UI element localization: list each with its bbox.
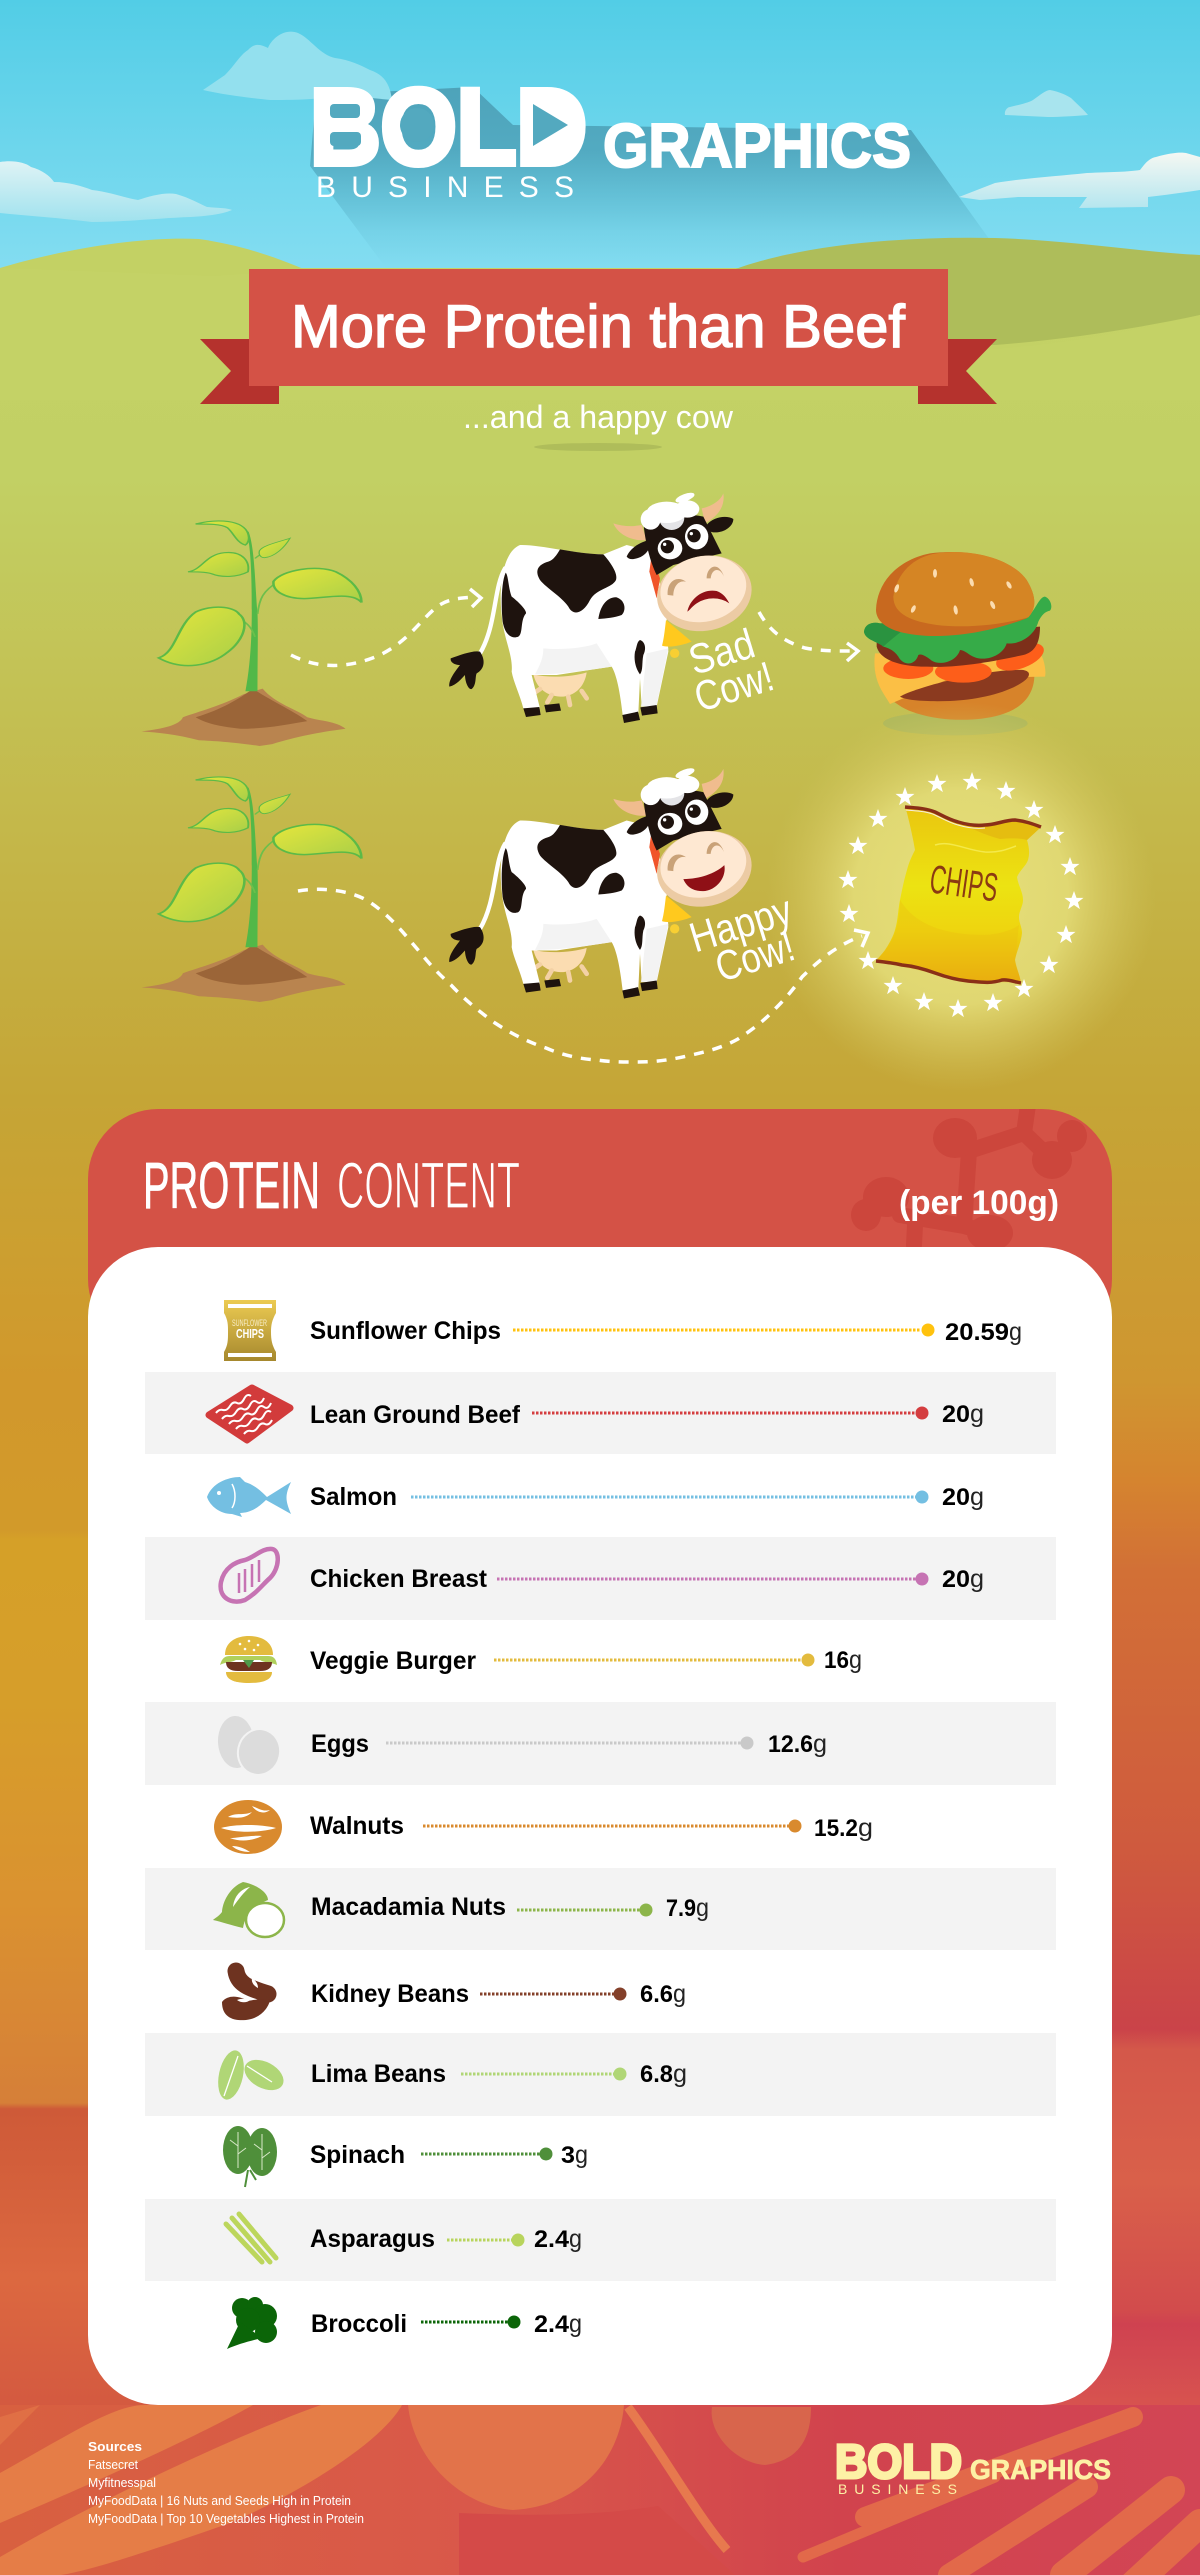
row: Eggs — [217, 1715, 827, 1779]
heading: CONTENT — [337, 1148, 520, 1222]
row: Salmon: Salmon — [310, 1483, 397, 1511]
row: Walnuts — [214, 1800, 873, 1854]
footer logo: BUSINESS — [838, 2481, 957, 2497]
row: Chicken Breast: g — [970, 1565, 984, 1593]
row: Asparagus: Asparagus — [310, 2225, 435, 2253]
row: Lean Ground Beef: 20 — [942, 1401, 970, 1428]
icon: sunflower chips bag: CHIPS — [236, 1326, 264, 1341]
row: Asparagus — [226, 2214, 582, 2262]
row: Sunflower Chips — [224, 1300, 1022, 1361]
row: Veggie Burger: 16 — [824, 1647, 849, 1674]
row: Salmon — [207, 1477, 984, 1517]
title: More Protein than Beef — [291, 293, 905, 360]
panel: protein content — [88, 1105, 1112, 2405]
row: Macadamia Nuts: Macadamia Nuts — [311, 1893, 506, 1921]
row: Veggie Burger — [220, 1636, 862, 1683]
row: Broccoli: g — [569, 2310, 582, 2338]
row: Walnuts: 15.2 — [814, 1815, 858, 1842]
sources: Fatsecret — [88, 2457, 138, 2472]
icon: eggs — [217, 1715, 284, 1779]
icon: walnut — [214, 1800, 282, 1854]
row: Kidney Beans: Kidney Beans — [311, 1980, 469, 2008]
row: Broccoli: Broccoli — [311, 2310, 407, 2338]
row: Lima Beans: Lima Beans — [311, 2060, 446, 2088]
row: Lean Ground Beef — [209, 1388, 984, 1440]
icon: kidney beans — [222, 1971, 270, 2020]
icon: veggie burger — [220, 1636, 277, 1683]
row: Sunflower Chips: Sunflower Chips — [310, 1317, 501, 1345]
chips bag — [876, 807, 1041, 983]
footer logo — [835, 2436, 1111, 2497]
sources: Sources — [88, 2439, 142, 2454]
row: Spinach: 3 — [561, 2142, 575, 2169]
label: happy cow: Cow! — [710, 922, 800, 991]
icon: asparagus — [226, 2214, 276, 2262]
label: sad cow: Sad — [683, 619, 760, 684]
star ring — [838, 772, 1084, 1017]
label: sad cow — [683, 619, 779, 721]
subtitle shadow — [534, 443, 662, 451]
arrow: sad cow to burger — [759, 612, 858, 661]
icon: spinach — [223, 2126, 277, 2187]
icon: sunflower chips bag: SUNFLOWER — [232, 1318, 267, 1328]
glow behind chips — [766, 702, 1156, 1092]
background: food photo right margin — [1000, 1100, 1200, 2575]
plant: bottom row — [141, 777, 361, 1002]
subtitle: ...and a happy cow — [463, 399, 734, 435]
row: Macadamia Nuts: g — [696, 1894, 709, 1922]
row: Salmon: 20 — [942, 1484, 970, 1511]
row: Salmon: g — [970, 1483, 984, 1511]
molecule watermark — [851, 1105, 1087, 1251]
row: Kidney Beans: g — [673, 1980, 686, 2008]
icon: lima beans — [214, 2048, 289, 2102]
row: Lean Ground Beef: g — [970, 1400, 984, 1428]
row: Asparagus: g — [569, 2225, 582, 2253]
row: Sunflower Chips: g — [1009, 1318, 1022, 1346]
burger — [864, 552, 1051, 735]
arrow: plant to chips — [298, 889, 868, 1062]
sources: MyFoodData | 16 Nuts and Seeds High in Protein — [88, 2493, 351, 2508]
row: Kidney Beans — [222, 1971, 686, 2020]
hills — [0, 238, 1200, 400]
row: Lima Beans: 6.8 — [640, 2061, 673, 2088]
icon: ground beef — [209, 1388, 290, 1440]
icon: macadamia — [213, 1882, 284, 1937]
background: food photo bottom — [0, 2405, 1200, 2575]
row: Veggie Burger: g — [849, 1646, 862, 1674]
row: Lean Ground Beef: Lean Ground Beef — [310, 1401, 521, 1429]
footer logo: GRAPHICS — [970, 2454, 1111, 2485]
cow: happy — [449, 766, 759, 998]
chips label: CHIPS — [927, 857, 1001, 911]
row: Walnuts: Walnuts — [310, 1812, 404, 1840]
row: Spinach — [223, 2126, 588, 2187]
row: Eggs: g — [813, 1730, 827, 1758]
row: Spinach: g — [575, 2141, 588, 2169]
icon: broccoli — [227, 2297, 277, 2349]
row: Chicken Breast: 20 — [942, 1566, 970, 1593]
icon: fish — [207, 1477, 291, 1517]
row: Veggie Burger: Veggie Burger — [310, 1647, 476, 1675]
row: Eggs: 12.6 — [768, 1731, 813, 1758]
row: Broccoli — [227, 2297, 582, 2349]
row bands — [145, 1372, 1056, 2281]
row: Kidney Beans: 6.6 — [640, 1981, 673, 2008]
row: Chicken Breast: Chicken Breast — [310, 1565, 488, 1593]
row: Spinach: Spinach — [310, 2141, 405, 2169]
row: Walnuts: g — [858, 1814, 873, 1842]
cow: sad — [449, 491, 759, 723]
logo: Bold Business Graphics: BUSINESS — [316, 171, 574, 204]
logo: Bold Business Graphics: GRAPHICS — [603, 112, 911, 181]
row: Chicken Breast — [221, 1549, 984, 1602]
row: Broccoli: 2.4 — [534, 2311, 570, 2338]
sources — [88, 2439, 364, 2526]
label: happy cow: Happy — [684, 886, 797, 961]
label: sad cow: Cow! — [689, 652, 779, 721]
sources: Myfitnesspal — [88, 2475, 156, 2490]
clouds — [0, 32, 1200, 222]
background: ground gradient — [0, 268, 1200, 1100]
row: Sunflower Chips: 20.59 — [945, 1319, 1009, 1346]
background: ground strip above panel — [0, 1100, 1200, 1120]
per 100g: (per 100g) — [899, 1184, 1059, 1222]
footer logo: BOLD — [835, 2436, 962, 2489]
arrow: plant to sad cow — [291, 589, 481, 666]
row: Macadamia Nuts: 7.9 — [666, 1895, 696, 1922]
title banner — [200, 269, 997, 404]
background: sky — [0, 0, 1200, 290]
label: happy cow — [684, 886, 800, 991]
logo: Bold Business Graphics: BOLD — [310, 66, 587, 187]
row: Asparagus: 2.4 — [534, 2226, 570, 2253]
logo: Bold Business Graphics — [310, 66, 911, 204]
white card — [88, 1247, 1112, 2405]
sources: MyFoodData | Top 10 Vegetables Highest in Protein — [88, 2511, 364, 2526]
heading: PROTEIN — [143, 1148, 320, 1222]
row: Macadamia Nuts — [213, 1882, 709, 1937]
plant: top row — [141, 521, 361, 746]
logo long shadow — [310, 87, 1010, 268]
row: Lima Beans — [214, 2048, 687, 2102]
background: food photo left margin — [0, 1100, 200, 2575]
icon: chicken breast — [221, 1549, 278, 1602]
row: Eggs: Eggs — [311, 1730, 369, 1758]
row: Lima Beans: g — [673, 2060, 687, 2088]
icon: sunflower chips bag — [224, 1300, 276, 1361]
